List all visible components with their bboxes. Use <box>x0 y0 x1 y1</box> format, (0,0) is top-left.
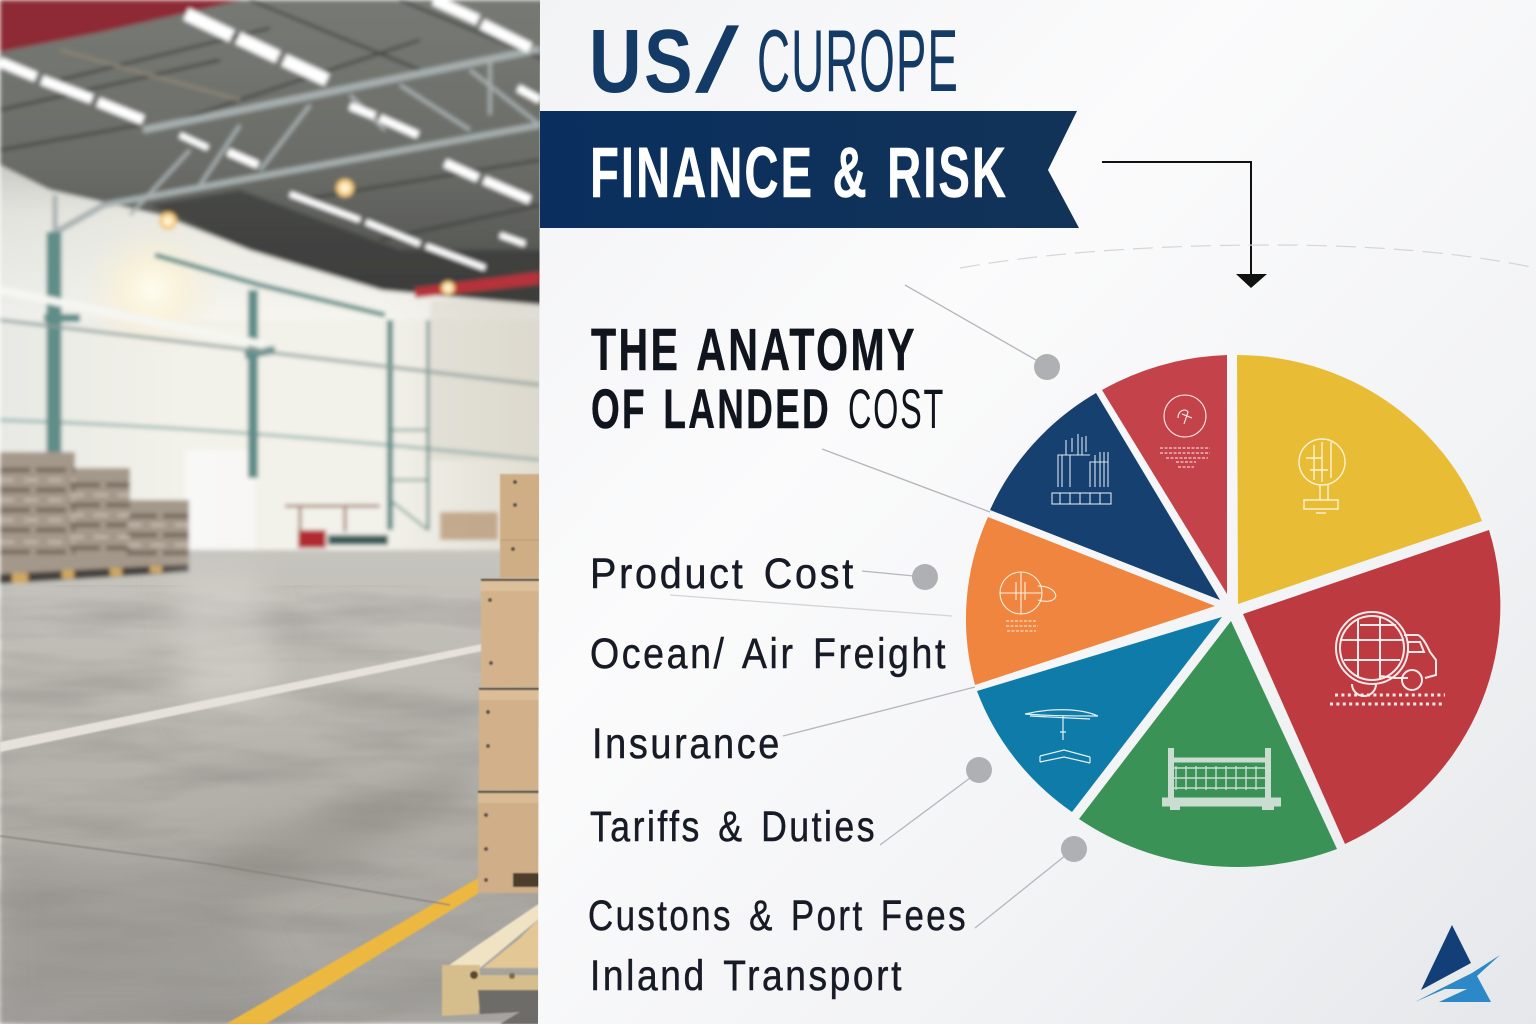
warehouse floor <box>0 550 545 1024</box>
icon: yellow wedge emblem <box>1299 439 1345 513</box>
label: Ocean/ Air Freight: Ocean/ Air Freight <box>590 630 948 678</box>
wedge: large red <box>1243 530 1500 844</box>
banner: Finance & Risk <box>540 111 1079 228</box>
title: US/ CUROPE <box>589 10 959 112</box>
right content panel <box>538 0 1536 1024</box>
label: Insurance: Insurance <box>592 720 782 768</box>
pie chart: landed cost anatomy <box>966 355 1500 867</box>
title: US/ CUROPE: US <box>589 12 695 112</box>
label: Tariffs & Duties: Tariffs & Duties <box>590 803 877 851</box>
floor mottling <box>0 585 545 1024</box>
label: Inland Transport: Inland Transport <box>590 952 904 1000</box>
connector lines and dots <box>670 285 1087 928</box>
wedge: green <box>1079 621 1337 867</box>
icon: red wedge truck with globe <box>1330 612 1445 704</box>
logo <box>1415 925 1500 1002</box>
wedge: blue <box>977 617 1222 812</box>
wedge: navy <box>990 393 1220 600</box>
arrow from banner to pie <box>1102 162 1267 288</box>
cost component labels <box>588 550 968 1000</box>
wedge: small red <box>1102 355 1227 594</box>
banner: Finance & Risk: FINANCE & RISK <box>590 134 1008 213</box>
stacked cardboard boxes <box>478 474 545 893</box>
icon: blue wedge canopy <box>1025 710 1098 763</box>
heading: The Anatomy of Landed Cost <box>591 317 945 440</box>
icon: small red wedge emblem <box>1160 395 1210 467</box>
wall columns and rails <box>0 232 540 530</box>
warehouse photo background <box>0 0 545 1024</box>
stacked goods on pallets <box>0 452 189 574</box>
heading: The Anatomy of Landed Cost: COST <box>848 377 945 440</box>
icon: green wedge gate <box>1162 748 1281 808</box>
label: Custons & Port Fees: Custons & Port Fees <box>588 892 968 940</box>
title: US/ CUROPE: CUROPE <box>757 11 959 110</box>
warehouse ceiling <box>0 0 545 305</box>
heading: The Anatomy of Landed Cost: THE ANATOMY <box>591 317 917 383</box>
heading: The Anatomy of Landed Cost: OF LANDED <box>591 377 831 440</box>
wedge: orange <box>966 517 1215 685</box>
label: Product Cost: Product Cost <box>590 550 856 598</box>
title: US/ CUROPE: / <box>695 10 740 112</box>
distant equipment <box>298 530 326 548</box>
warehouse wall <box>0 160 545 560</box>
icon: navy wedge buildings <box>1052 434 1111 504</box>
floor line markings <box>0 644 482 752</box>
wedge: yellow <box>1237 355 1482 604</box>
icon: orange wedge globe <box>1000 572 1056 631</box>
wooden pallet <box>442 903 540 1024</box>
